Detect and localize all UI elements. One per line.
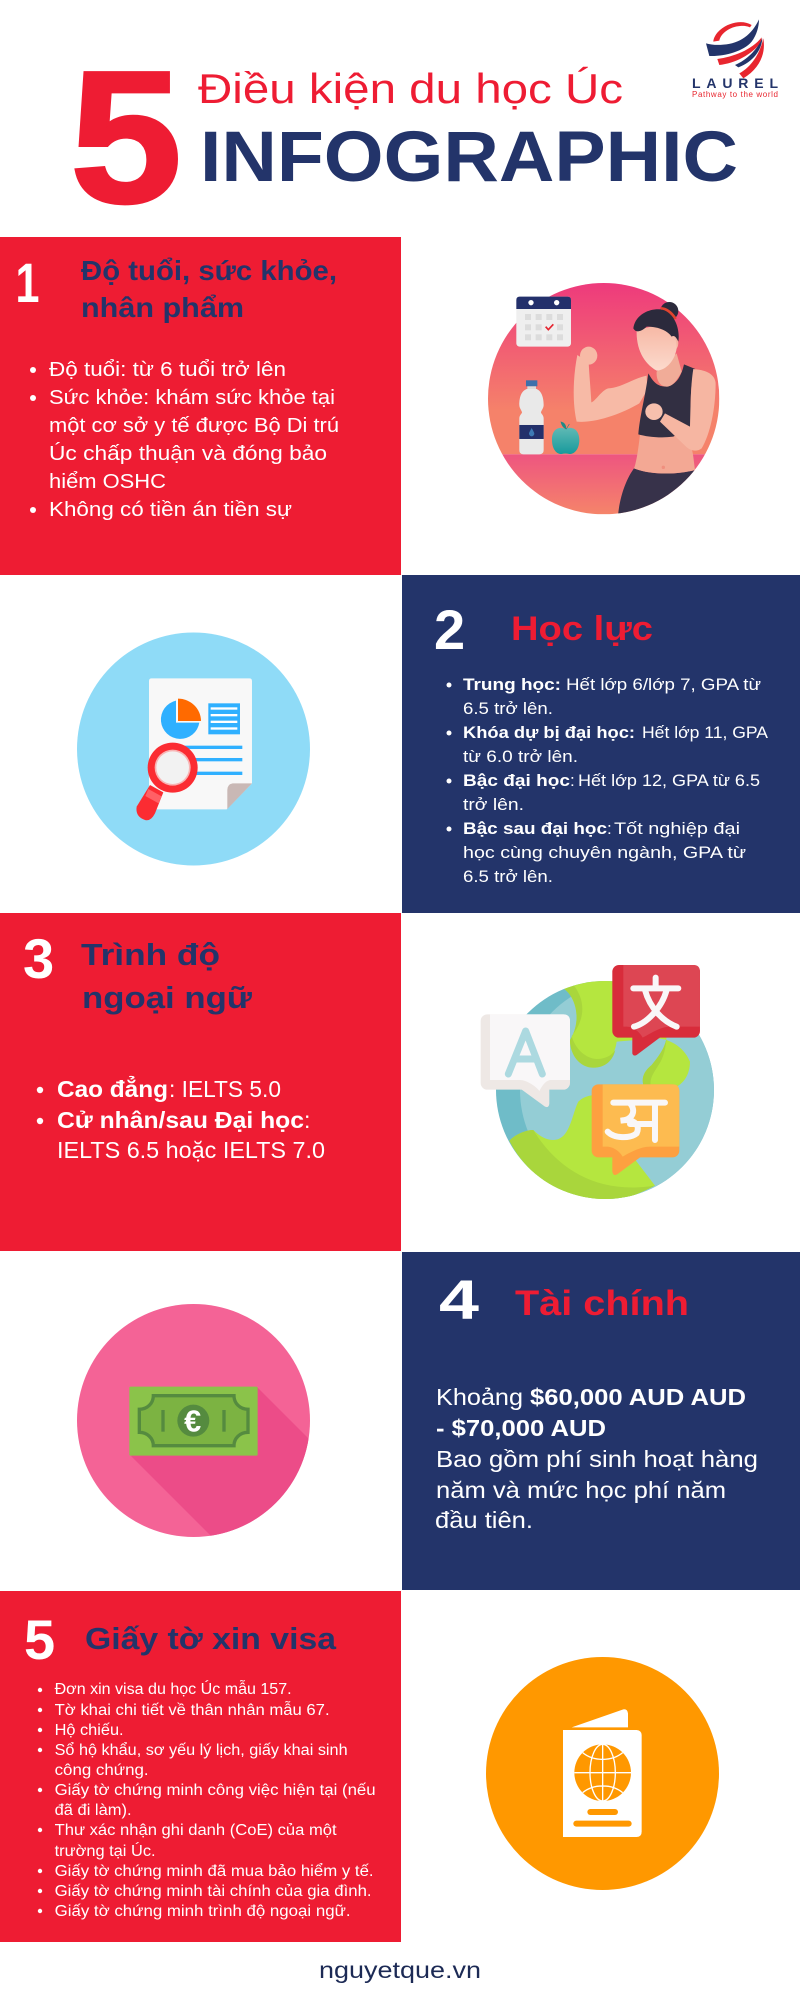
bullet list: 6.5 trở lên. — [463, 867, 553, 886]
body text: - $70,000 AUD — [436, 1415, 606, 1441]
panel background — [0, 237, 401, 575]
icon: document with magnifier — [77, 632, 310, 866]
bullet list: Hết lớp 12, GPA từ 6.5 — [578, 771, 760, 790]
icon: passport — [486, 1657, 719, 1890]
bullet list: học cùng chuyên ngành, GPA từ — [463, 843, 746, 862]
number 5: 5 — [24, 1608, 55, 1671]
bullet list — [37, 1074, 325, 1163]
number 3: 3 — [23, 927, 54, 990]
heading: ngoại ngữ — [82, 980, 253, 1015]
bullet list: Cao đẳng — [57, 1074, 168, 1102]
bullet list: trường tại Úc. — [55, 1843, 156, 1860]
panel: 1 age, health, character — [0, 237, 401, 575]
bullet list: Tờ khai chi tiết về thân nhân mẫu 67. — [55, 1702, 330, 1719]
bullet list: trở lên. — [463, 795, 524, 814]
heading: Học lực — [511, 610, 653, 648]
globe — [496, 981, 714, 1199]
heading: Độ tuổi, sức khỏe, — [81, 255, 337, 286]
heading: nhân phẩm — [81, 292, 244, 323]
body text: $60,000 AUD AUD — [530, 1384, 746, 1410]
icon: fitness woman illustration — [488, 283, 719, 516]
big number 5: 5 — [70, 32, 182, 242]
bullet list: Hộ chiếu. — [55, 1722, 124, 1739]
bullet list: Tốt nghiệp đại — [614, 819, 740, 838]
bullet list: công chứng. — [55, 1762, 149, 1779]
bullet list: hiểm OSHC — [49, 471, 166, 493]
subtitle: Điều kiện du học Úc — [198, 65, 623, 112]
panel: 2 academic ability — [402, 575, 800, 913]
title: INFOGRAPHIC — [200, 118, 738, 197]
bullet list: Bậc sau đại học — [463, 819, 607, 838]
heading: Trình độ — [81, 937, 220, 972]
body text: Khoảng — [436, 1384, 523, 1410]
body text: Bao gồm phí sinh hoạt hàng — [436, 1446, 758, 1472]
body text: đầu tiên. — [435, 1507, 533, 1533]
bullet list: Giấy tờ chứng minh đã mua bảo hiểm y tế. — [55, 1863, 374, 1880]
heading: Giấy tờ xin visa — [85, 1621, 337, 1656]
number 1: 1 — [16, 251, 40, 314]
bubble: A — [481, 1014, 570, 1107]
bullet list: Hết lớp 6/lớp 7, GPA từ — [566, 675, 761, 694]
bullet list — [38, 1681, 376, 1920]
heading — [81, 255, 337, 323]
body text: năm và mức học phí năm — [436, 1477, 726, 1503]
panel: 5 visa documents — [0, 1591, 401, 1942]
logo mark — [706, 19, 764, 78]
logo name: LAUREL — [692, 75, 778, 91]
icon: banknote — [77, 1304, 310, 1537]
bullet list: từ 6.0 trở lên. — [463, 747, 578, 766]
bullet list — [30, 359, 339, 521]
heading: Tài chính — [515, 1284, 689, 1323]
number 4: 4 — [439, 1268, 479, 1331]
bullet list: Giấy tờ chứng minh trình độ ngoại ngữ. — [55, 1903, 351, 1920]
bullet list — [446, 675, 769, 886]
blue circle — [77, 632, 310, 866]
bullet list: IELTS 6.5 hoặc IELTS 7.0 — [57, 1137, 325, 1163]
logo tagline: Pathway to the world — [692, 90, 778, 99]
panel background — [0, 1591, 401, 1942]
bullet list: Không có tiền án tiền sự — [49, 499, 292, 521]
bullet list: Hết lớp 11, GPA — [642, 723, 769, 742]
number 2: 2 — [434, 598, 465, 661]
pink circle — [77, 1304, 310, 1537]
document — [136, 678, 252, 820]
passport booklet — [563, 1709, 642, 1837]
bullet list: Giấy tờ chứng minh tài chính của gia đình. — [55, 1883, 372, 1900]
bubble: Chinese character — [612, 965, 700, 1056]
icon: globe with language bubbles — [480, 965, 714, 1199]
bullet list: : — [570, 771, 575, 790]
panel background — [0, 913, 401, 1251]
bullet list: : — [304, 1107, 310, 1133]
bullet list: Bậc đại học — [463, 771, 570, 790]
note — [129, 1387, 258, 1456]
long shadow — [131, 1388, 308, 1536]
bullet list: một cơ sở y tế được Bộ Di trú — [49, 415, 339, 437]
bullet list: : IELTS 5.0 — [169, 1076, 281, 1102]
bullet list: đã đi làm). — [55, 1802, 132, 1819]
bullet list: Sổ hộ khẩu, sơ yếu lý lịch, giấy khai sinh — [55, 1742, 348, 1759]
bullet list: Úc chấp thuận và đóng bảo — [49, 442, 327, 465]
footer website: nguyetque.vn — [319, 1957, 481, 1983]
orange circle — [486, 1657, 719, 1890]
bullet list: Giấy tờ chứng minh công việc hiện tại (nếu — [55, 1782, 376, 1799]
bullet list: : — [607, 819, 612, 838]
note: € — [184, 1405, 201, 1439]
bullet list: Thư xác nhận ghi danh (CoE) của một — [55, 1822, 337, 1839]
panel: 3 foreign language level — [0, 913, 401, 1251]
panel background — [402, 1252, 800, 1590]
bubble: Devanagari character — [592, 1084, 679, 1175]
bullet list: 6.5 trở lên. — [463, 699, 553, 718]
bullet list: Sức khỏe: khám sức khỏe tại — [49, 387, 335, 409]
panel: 4 finances — [402, 1252, 800, 1590]
heading — [81, 937, 253, 1015]
bullet list: Độ tuổi: từ 6 tuổi trở lên — [49, 359, 286, 381]
bullet list: Trung học: — [463, 675, 561, 694]
panel background — [402, 575, 800, 913]
bullet list: Khóa dự bị đại học: — [463, 723, 635, 742]
body text — [435, 1384, 758, 1533]
logo: Laurel — [692, 19, 778, 99]
bullet list: Cử nhân/sau Đại học — [57, 1107, 304, 1133]
bullet list: Đơn xin visa du học Úc mẫu 157. — [55, 1681, 292, 1698]
